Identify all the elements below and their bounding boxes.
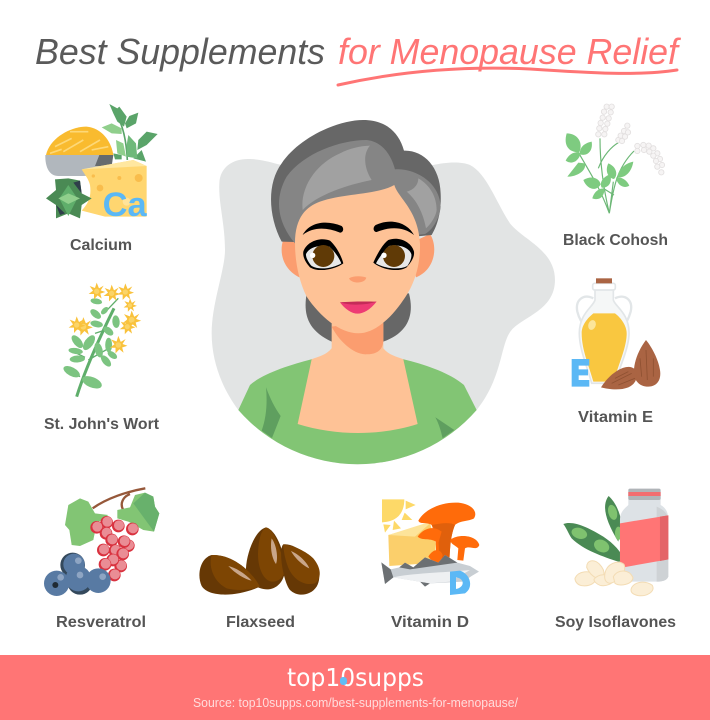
icon: calcium foods: Ca	[103, 186, 147, 224]
label: Black Cohosh: Black Cohosh	[563, 232, 668, 249]
label: Soy Isoflavones: Soy Isoflavones	[555, 614, 676, 631]
label: Vitamin D: Vitamin D	[391, 614, 469, 631]
title	[35, 31, 682, 85]
icon: St. John's Wort	[62, 283, 141, 397]
footer banner	[0, 655, 710, 720]
source line: Source: top10supps.com/best-supplements-for-menopause/	[193, 696, 519, 710]
icon: Soy Isoflavones	[563, 489, 668, 596]
icon: Black Cohosh	[566, 104, 665, 213]
label: Calcium: Calcium	[70, 237, 132, 254]
central illustration: woman	[212, 120, 555, 464]
icon: Vitamin E oil and almonds	[572, 278, 660, 389]
label: Flaxseed: Flaxseed	[226, 614, 295, 631]
icon: Flaxseed	[199, 527, 320, 595]
label: Resveratrol: Resveratrol	[56, 614, 146, 631]
title: Best Supplements	[35, 31, 325, 72]
label: St. John's Wort: St. John's Wort	[44, 416, 160, 433]
icon: Vitamin D foods	[381, 499, 479, 595]
label: Vitamin E: Vitamin E	[578, 409, 653, 426]
icon: Resveratrol grapes and blueberries	[44, 488, 159, 596]
logo: top10supps	[287, 663, 424, 692]
icon: calcium foods	[45, 104, 158, 224]
title: for Menopause Relief	[338, 31, 682, 72]
